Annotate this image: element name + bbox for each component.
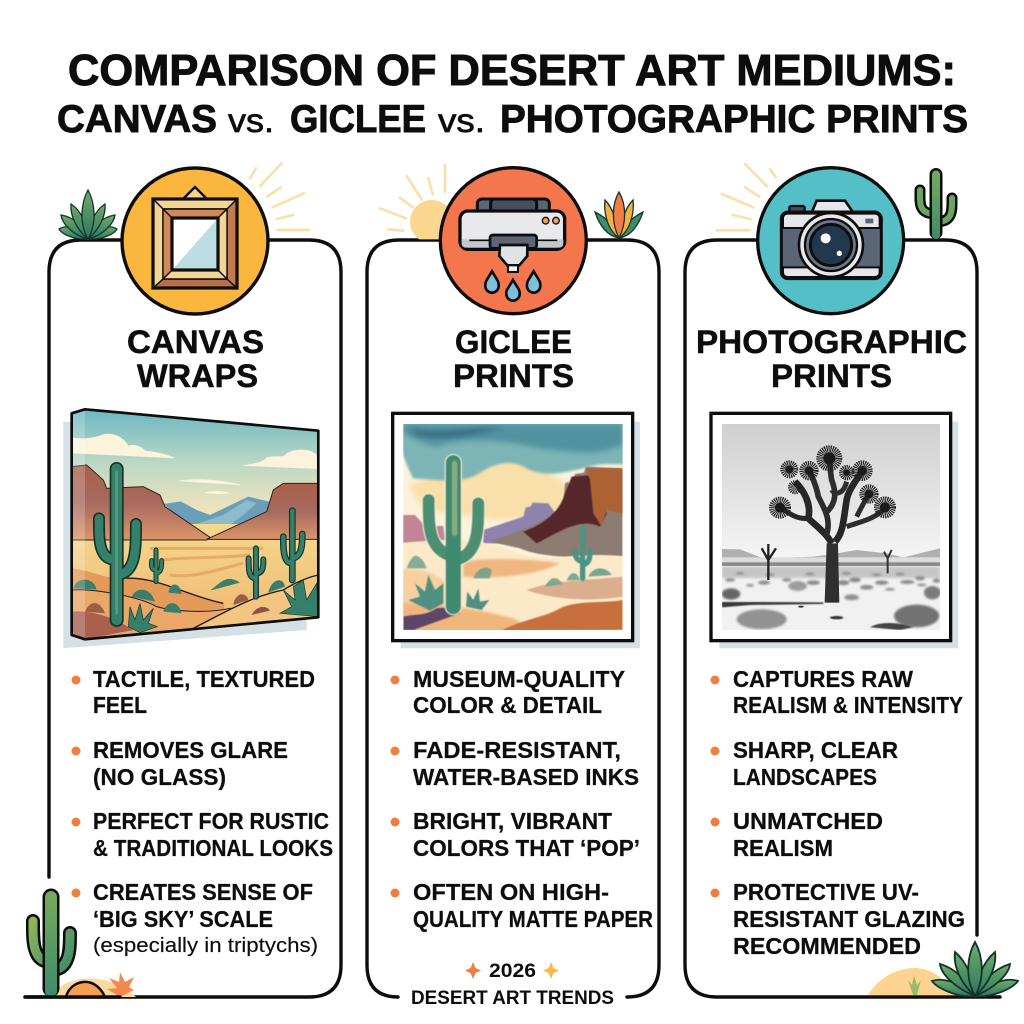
heading: photographic prints bbox=[696, 324, 967, 394]
bullet list: photographic prints: REALISM & INTENSITY bbox=[733, 692, 963, 718]
bullet list: canvas wraps: CREATES SENSE OF bbox=[93, 879, 313, 905]
bullet list: canvas wraps: (especially in triptychs) bbox=[93, 935, 318, 957]
bullet list: photographic prints: CAPTURES RAW bbox=[733, 666, 914, 692]
heading: canvas wraps: WRAPS bbox=[137, 358, 258, 394]
decoration: sun, tuft and agave bbox=[868, 942, 1018, 996]
bullet list: canvas wraps: PERFECT FOR RUSTIC bbox=[93, 808, 329, 834]
decoration: cactus, rock and shrub bbox=[25, 888, 136, 997]
panel frame: photographic prints bbox=[685, 240, 1000, 997]
illustration: black and white joshua tree photo bbox=[711, 413, 958, 648]
bullet list: giclee prints: OFTEN ON HIGH- bbox=[413, 879, 609, 905]
bullet list: giclee prints: MUSEUM-QUALITY bbox=[413, 666, 625, 692]
heading: canvas wraps bbox=[127, 324, 264, 394]
sun rays: photographic bbox=[717, 164, 776, 230]
panel: canvas wraps bbox=[25, 163, 341, 997]
title: vs. bbox=[438, 102, 485, 139]
heading: giclee prints bbox=[453, 324, 574, 394]
panel: giclee prints bbox=[367, 165, 659, 1009]
bullet list: giclee prints: FADE-RESISTANT, bbox=[413, 737, 621, 763]
icon: cactus bbox=[920, 168, 952, 239]
bullet list: photographic prints: PROTECTIVE UV- bbox=[733, 879, 919, 905]
illustration: canvas wrap desert painting bbox=[63, 407, 320, 648]
bullet list: giclee prints bbox=[390, 666, 653, 932]
bullet list: giclee prints: COLORS THAT ‘POP’ bbox=[413, 835, 640, 861]
bullet list: photographic prints: LANDSCAPES bbox=[733, 764, 877, 790]
title: COMPARISON OF DESERT ART MEDIUMS: bbox=[68, 46, 956, 95]
icon: desert flower plant bbox=[595, 192, 643, 238]
bullet list: canvas wraps: REMOVES GLARE bbox=[93, 737, 288, 763]
icon: camera bbox=[758, 168, 904, 314]
icon: half sun with rays bbox=[380, 165, 453, 243]
bullet list: giclee prints: BRIGHT, VIBRANT bbox=[413, 808, 613, 834]
footer label: 2026 desert art trends bbox=[411, 961, 614, 1009]
bullet list: photographic prints: SHARP, CLEAR bbox=[733, 737, 898, 763]
heading: photographic prints: PHOTOGRAPHIC bbox=[696, 324, 967, 360]
heading: giclee prints: PRINTS bbox=[453, 358, 574, 394]
panel frame: canvas wraps bbox=[25, 240, 341, 997]
bullet list: photographic prints: UNMATCHED bbox=[733, 808, 883, 834]
footer label: 2026 desert art trends: 2026 bbox=[489, 961, 536, 982]
bullet list: photographic prints: REALISM bbox=[733, 835, 833, 861]
bullet list: canvas wraps: ‘BIG SKY’ SCALE bbox=[93, 906, 273, 932]
bullet list: giclee prints: WATER-BASED INKS bbox=[413, 764, 639, 790]
bullet list: canvas wraps bbox=[72, 666, 333, 957]
heading: photographic prints: PRINTS bbox=[771, 358, 892, 394]
heading: canvas wraps: CANVAS bbox=[127, 324, 264, 360]
bullet list: photographic prints: RESISTANT GLAZING bbox=[733, 906, 965, 932]
title: CANVAS bbox=[57, 98, 217, 141]
bullet list: canvas wraps: FEEL bbox=[93, 692, 147, 718]
bullet list: canvas wraps: (NO GLASS) bbox=[93, 764, 226, 790]
icon: printer with ink drops bbox=[440, 168, 586, 314]
heading: giclee prints: GICLEE bbox=[455, 324, 572, 360]
icon: framed canvas bbox=[122, 168, 268, 314]
title: PHOTOGRAPHIC PRINTS bbox=[500, 98, 968, 141]
icon: agave plant bbox=[59, 190, 117, 239]
bullet list: canvas wraps: TACTILE, TEXTURED bbox=[93, 666, 315, 692]
panel frame: giclee prints bbox=[367, 240, 659, 997]
title: GICLEE bbox=[290, 98, 426, 141]
bullet list: canvas wraps: & TRADITIONAL LOOKS bbox=[93, 835, 333, 861]
panel: photographic prints bbox=[685, 164, 1018, 997]
illustration: giclee watercolor desert print bbox=[393, 413, 640, 648]
bullet list: photographic prints bbox=[710, 666, 965, 959]
footer label: 2026 desert art trends: DESERT ART TRENDS bbox=[411, 988, 614, 1009]
title bbox=[57, 46, 968, 141]
sun rays: canvas bbox=[250, 163, 309, 230]
bullet list: giclee prints: QUALITY MATTE PAPER bbox=[413, 906, 653, 932]
bullet list: giclee prints: COLOR & DETAIL bbox=[413, 692, 602, 718]
title: vs. bbox=[228, 102, 274, 139]
bullet list: photographic prints: RECOMMENDED bbox=[733, 933, 921, 959]
